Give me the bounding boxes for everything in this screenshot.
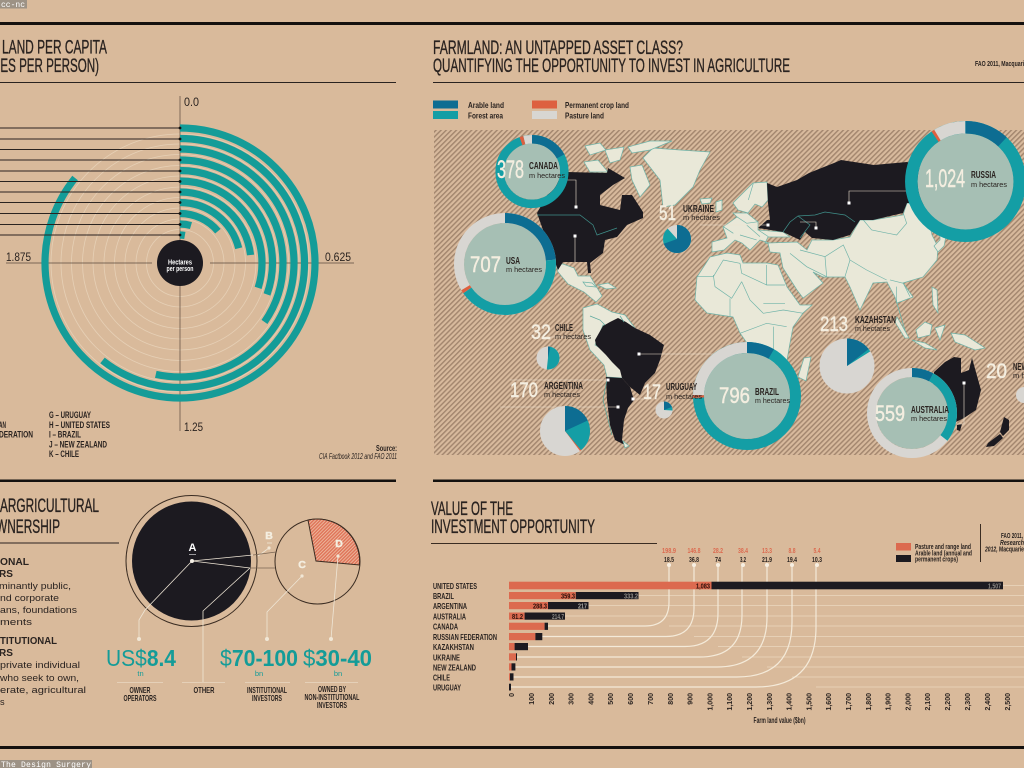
x axis labels: 1,800 bbox=[866, 693, 873, 711]
value: $30-40 bn: NON-INSTITUTIONAL bbox=[304, 692, 360, 702]
donut: Russia bbox=[911, 127, 1020, 236]
donut: Brazil bbox=[698, 348, 796, 444]
value: $30-40 bn bbox=[303, 645, 372, 710]
heading: land per capita: LAND PER CAPITA bbox=[2, 38, 107, 58]
map labels: 17 bbox=[643, 381, 661, 404]
map labels: UKRAINE bbox=[683, 204, 714, 215]
radial bar chart bbox=[0, 96, 354, 434]
heading: farmland bbox=[433, 38, 1024, 83]
map labels: m hectares bbox=[529, 171, 565, 180]
donut: Australia bbox=[872, 372, 952, 454]
x axis labels: 1,700 bbox=[846, 693, 853, 711]
x axis labels: 1,900 bbox=[886, 693, 892, 711]
text block: institutional owners bbox=[0, 557, 86, 707]
map labels: 1,024 bbox=[925, 165, 965, 193]
x axis labels: 500 bbox=[608, 693, 615, 705]
map labels: 32 bbox=[531, 321, 551, 344]
world map bbox=[434, 130, 1024, 455]
top values: 38.4 bbox=[738, 548, 748, 555]
country labels: UKRAINE bbox=[433, 652, 460, 662]
bar values: 1,083 bbox=[696, 582, 710, 590]
value: $70-100 bn: bn bbox=[255, 669, 263, 678]
bar source note bbox=[980, 524, 1024, 562]
value: US$8.4 tn bbox=[106, 645, 176, 703]
map labels: BRAZIL bbox=[755, 387, 779, 398]
value: US$8.4 tn: OPERATORS bbox=[124, 693, 157, 703]
value: $70-100 bn: INSTITUTIONAL bbox=[247, 685, 287, 695]
value: $30-40 bn: bn bbox=[334, 669, 342, 678]
country labels: CHILE bbox=[433, 672, 450, 682]
panel: agricultural ownership bbox=[0, 496, 372, 710]
x axis labels: 1,600 bbox=[826, 693, 833, 711]
heading: ownership: ARGRICULTURAL bbox=[0, 496, 99, 517]
radial bar chart: 0.625 bbox=[325, 252, 351, 264]
map legend: Forest area bbox=[468, 110, 503, 120]
x axis labels: 1,000 bbox=[708, 693, 714, 711]
top values: 13.3 bbox=[762, 548, 772, 555]
text block: institutional owners: who seek to own, bbox=[0, 673, 79, 683]
location dots bbox=[574, 202, 966, 408]
map labels: ARGENTINA bbox=[544, 381, 583, 392]
top values: 146.8 bbox=[688, 548, 701, 555]
connector lines bbox=[139, 543, 338, 682]
map legend: Pasture land bbox=[565, 110, 604, 120]
axis title: Farm land value ($bn) bbox=[754, 716, 806, 725]
country labels: ARGENTINA bbox=[433, 601, 467, 611]
bar values: 333.2 bbox=[624, 592, 638, 600]
x axis labels: 2,400 bbox=[985, 693, 992, 711]
leader lines bbox=[500, 180, 1008, 424]
bar legend: permanent crops) bbox=[915, 554, 958, 564]
text block: institutional owners: TITUTIONAL bbox=[0, 636, 57, 647]
map labels: m hectares bbox=[855, 324, 890, 333]
country labels: BRAZIL bbox=[433, 591, 454, 601]
value: $70-100 bn bbox=[220, 645, 298, 703]
point labels: A bbox=[189, 542, 197, 554]
heading: farmland: FARMLAND: AN UNTAPPED ASSET CLASS? bbox=[433, 38, 683, 59]
bar values: 1,507 bbox=[988, 582, 1001, 590]
x axis labels: 1,400 bbox=[786, 693, 794, 711]
radial bar chart: Hectares bbox=[168, 258, 192, 266]
x axis labels: 1,100 bbox=[727, 693, 734, 711]
connector curves bbox=[511, 563, 819, 687]
top values: 8.8 bbox=[788, 548, 796, 555]
value: $30-40 bn: $30-40 bbox=[303, 645, 372, 671]
map labels: URUGUAY bbox=[666, 382, 697, 393]
radial bar chart: 1.875 bbox=[6, 252, 31, 264]
map labels: m hectares bbox=[544, 390, 580, 399]
map labels: 20 bbox=[986, 360, 1007, 383]
text block: institutional owners: ments bbox=[0, 617, 33, 627]
map labels: CHILE bbox=[555, 323, 573, 334]
value: US$8.4 tn: tn bbox=[137, 669, 144, 678]
country key: G – URUGUAY bbox=[49, 410, 91, 420]
map labels: 559 bbox=[875, 401, 905, 426]
country labels bbox=[433, 581, 497, 692]
country key: K – CHILE bbox=[49, 449, 79, 459]
map legend bbox=[433, 100, 629, 120]
top values: 18.5 bbox=[664, 557, 674, 564]
map labels: 378 bbox=[497, 156, 524, 184]
pie: New Zealand bbox=[1016, 387, 1024, 403]
x axis labels: 900 bbox=[688, 693, 694, 705]
map labels: m hectares bbox=[971, 180, 1007, 189]
top values: 74 bbox=[715, 557, 721, 564]
label: other bbox=[182, 682, 225, 695]
x axis labels: 2,200 bbox=[945, 693, 952, 711]
map labels: 51 bbox=[659, 202, 676, 225]
circle chart: C and D bbox=[275, 519, 360, 604]
country labels: URUGUAY bbox=[433, 682, 461, 692]
bar chart bbox=[433, 548, 1024, 725]
heading: value: INVESTMENT OPPORTUNITY bbox=[431, 517, 595, 538]
map labels: m hectares bbox=[555, 332, 591, 341]
radial bar chart: 1.25 bbox=[184, 422, 203, 434]
country key: I – BRAZIL bbox=[49, 430, 81, 440]
pie: Chile bbox=[542, 352, 554, 364]
x axis labels: 2,000 bbox=[906, 693, 912, 711]
bar values: 359.3 bbox=[561, 592, 575, 600]
x axis labels bbox=[509, 693, 1012, 711]
top values: 3.2 bbox=[740, 557, 746, 564]
top values bbox=[662, 548, 822, 564]
text block: institutional owners: ans, foundations bbox=[0, 605, 77, 615]
point labels: D bbox=[335, 538, 343, 550]
top values: 19.4 bbox=[787, 557, 797, 564]
bar legend: Pasture and range land bbox=[915, 542, 971, 551]
point labels: B bbox=[265, 530, 273, 542]
x axis labels: 200 bbox=[549, 693, 556, 705]
heading: value bbox=[431, 499, 657, 544]
value: $30-40 bn: INVESTORS bbox=[317, 700, 347, 710]
text block: institutional owners: s bbox=[0, 697, 5, 707]
top values: 28.2 bbox=[713, 548, 723, 555]
heading: value: VALUE OF THE bbox=[431, 499, 513, 520]
x axis labels: 1,300 bbox=[767, 693, 774, 711]
map labels: AUSTRALIA bbox=[911, 405, 949, 416]
donut: USA bbox=[459, 218, 551, 310]
text block: institutional owners: nd corporate bbox=[0, 593, 59, 603]
country labels: CANADA bbox=[433, 622, 458, 632]
text block: institutional owners: minantly public, bbox=[0, 581, 71, 591]
value: $30-40 bn: OWNED BY bbox=[318, 684, 346, 694]
pie: Argentina bbox=[552, 418, 578, 444]
x axis labels: 700 bbox=[648, 693, 655, 705]
pie: Kazakhstan bbox=[833, 352, 861, 380]
top values: 36.8 bbox=[689, 557, 699, 564]
map labels: m hectares bbox=[755, 396, 790, 405]
country labels: AUSTRALIA bbox=[433, 612, 466, 622]
text block: institutional owners: private individual bbox=[0, 660, 80, 670]
x axis labels: 800 bbox=[668, 693, 675, 705]
country labels: NEW ZEALAND bbox=[433, 662, 476, 672]
top values: 198.9 bbox=[662, 548, 676, 555]
map labels: 213 bbox=[820, 313, 848, 336]
x axis labels: 300 bbox=[568, 693, 576, 705]
bar values: 217 bbox=[578, 602, 587, 610]
map legend: Arable land bbox=[468, 100, 504, 110]
map labels bbox=[470, 156, 1024, 426]
x axis labels: 1,500 bbox=[806, 693, 814, 711]
text block: institutional owners: erate, agricultural bbox=[0, 685, 86, 695]
heading: land per capita bbox=[0, 38, 396, 83]
x axis labels: 2,500 bbox=[1005, 693, 1012, 711]
pie: Uruguay bbox=[660, 406, 668, 414]
map labels: CANADA bbox=[529, 161, 558, 172]
x axis labels: 0 bbox=[509, 693, 516, 697]
top values: 21.9 bbox=[762, 557, 772, 564]
value: US$8.4 tn: US$8.4 bbox=[106, 645, 176, 671]
bar values: 214.7 bbox=[552, 612, 564, 621]
text block: institutional owners: ONAL bbox=[0, 557, 29, 568]
map labels: m hectares bbox=[506, 265, 542, 274]
country key: H – UNITED STATES bbox=[49, 420, 110, 430]
bar values bbox=[512, 582, 1001, 621]
heading: farmland: QUANTIFYING THE OPPORTUNITY TO INVEST IN AGRICULTURE bbox=[433, 56, 790, 77]
map legend: Permanent crop land bbox=[565, 100, 629, 110]
map labels: m hectares bbox=[683, 213, 720, 222]
value: $70-100 bn: INVESTORS bbox=[252, 693, 282, 703]
map labels: RUSSIA bbox=[971, 170, 996, 181]
source note: CIA Factbook 2012 and FAO 2011 bbox=[319, 452, 397, 461]
donut: Canada bbox=[500, 139, 564, 204]
panel: value of the investment opportunity bbox=[431, 499, 1024, 725]
bars bbox=[509, 582, 1003, 690]
x axis labels: 100 bbox=[529, 693, 536, 705]
top values: 5.4 bbox=[814, 548, 821, 555]
country key bbox=[0, 410, 110, 459]
radial bar chart: 0.0 bbox=[184, 97, 199, 109]
map labels: 707 bbox=[470, 252, 501, 277]
country key: J – NEW ZEALAND bbox=[49, 440, 107, 450]
source note bbox=[319, 444, 397, 461]
bar values: 81.2 bbox=[512, 612, 523, 621]
country labels: UNITED STATES bbox=[433, 581, 477, 591]
value: US$8.4 tn: OWNER bbox=[130, 685, 150, 695]
map labels: m hectares bbox=[666, 392, 702, 401]
label: other: OTHER bbox=[194, 685, 214, 695]
point labels: C bbox=[298, 559, 306, 571]
x axis labels: 400 bbox=[588, 693, 596, 705]
country labels: RUSSIAN FEDERATION bbox=[433, 632, 497, 642]
top values: 10.3 bbox=[812, 557, 822, 564]
point labels bbox=[137, 530, 343, 641]
map labels: 170 bbox=[510, 379, 538, 402]
bar legend: Arable land (annual and bbox=[915, 548, 972, 558]
value: $70-100 bn: $70-100 bbox=[220, 645, 298, 671]
source note: Source: bbox=[376, 444, 397, 453]
bar legend bbox=[896, 542, 972, 564]
x axis labels: 2,300 bbox=[965, 693, 972, 711]
map labels: 796 bbox=[719, 383, 750, 408]
x axis labels: 1,200 bbox=[747, 693, 754, 711]
map labels: USA bbox=[506, 256, 520, 267]
map labels: KAZAHSTAN bbox=[855, 315, 896, 326]
country key: DERATION bbox=[0, 430, 33, 440]
map labels: m hectares bbox=[911, 414, 947, 423]
panel: land per capita bbox=[0, 38, 397, 461]
pie: Ukraine bbox=[670, 232, 684, 246]
x axis labels: 2,100 bbox=[925, 693, 932, 711]
panel: farmland map bbox=[433, 38, 1024, 455]
country labels: KAZAKHSTAN bbox=[433, 642, 474, 652]
bar values: 288.3 bbox=[533, 602, 547, 610]
heading: ownership bbox=[0, 496, 119, 544]
licence tag: cc-nc: cc-nc bbox=[1, 1, 25, 10]
x axis labels: 600 bbox=[628, 693, 635, 705]
radial bar chart: per person bbox=[166, 264, 194, 273]
circle chart: A bbox=[126, 496, 257, 626]
